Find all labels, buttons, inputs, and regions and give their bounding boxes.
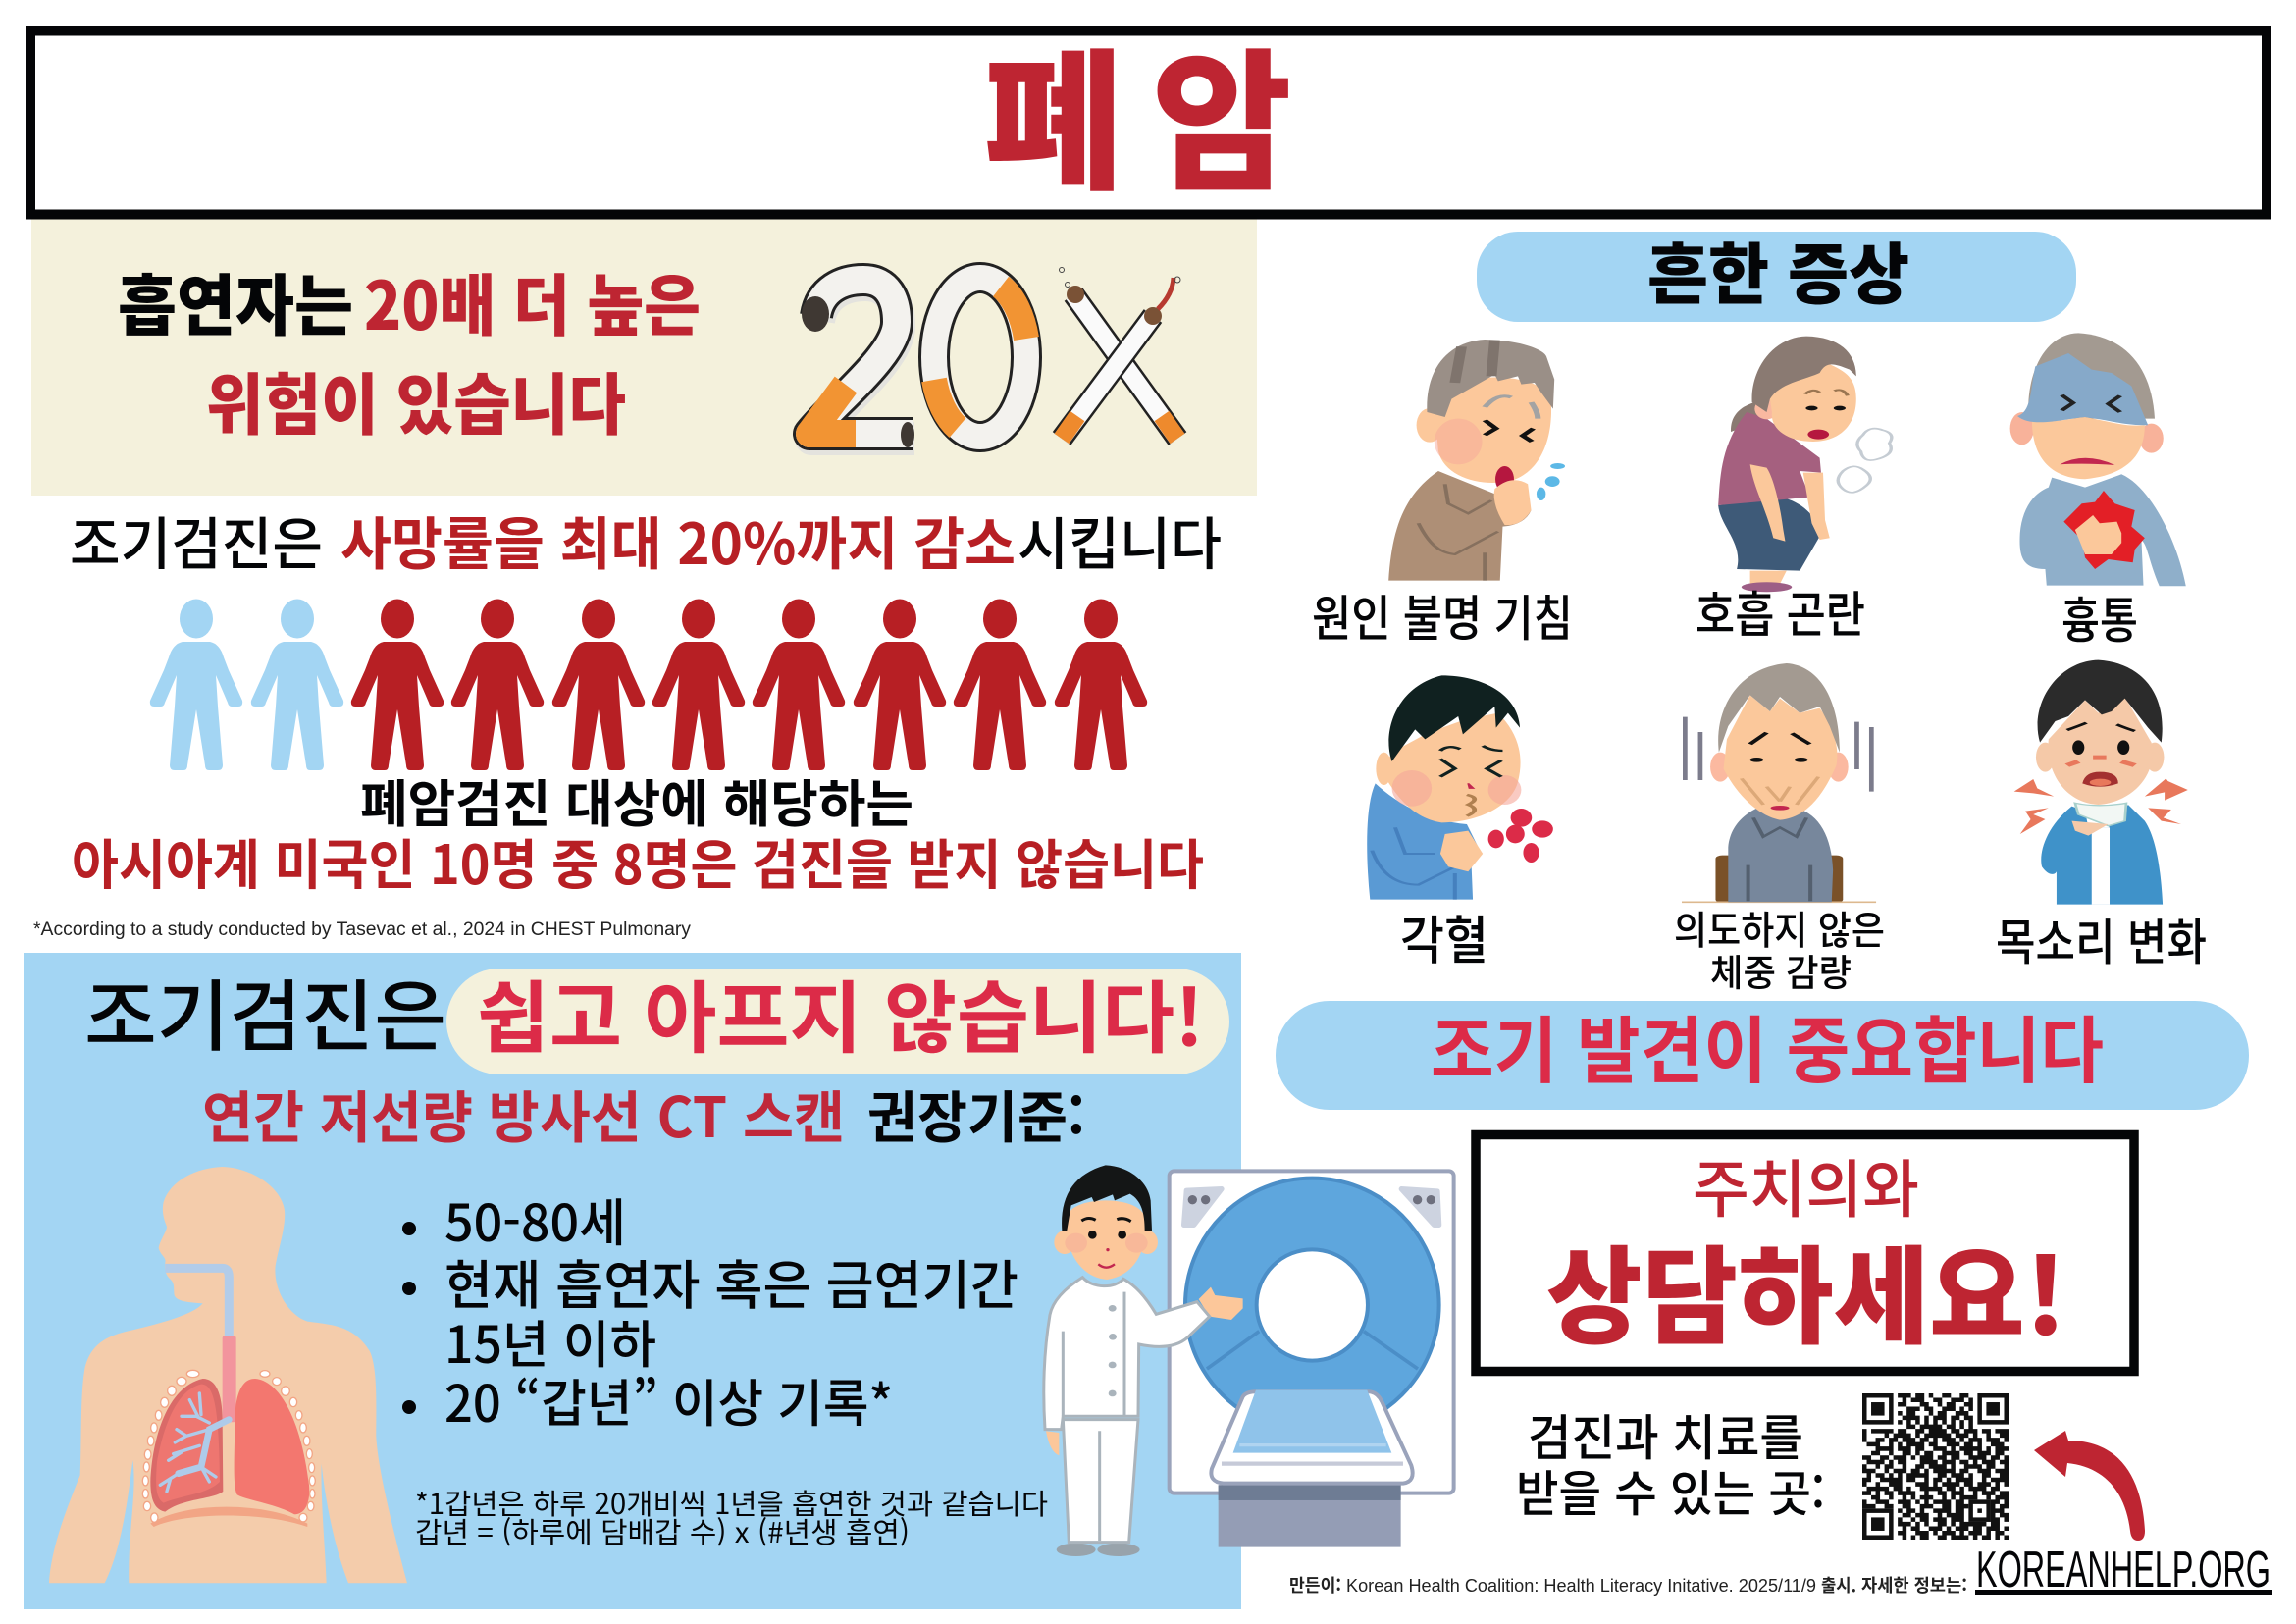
heading: screening is easy and painless: 조기검진은 xyxy=(84,954,446,1067)
heading: screening is easy and painless: 쉽고 아프지 않습니다! xyxy=(477,956,1204,1070)
title: 암 xyxy=(1152,0,1292,221)
text block: where to get screening: 검진과 치료를 xyxy=(1528,1399,1803,1470)
heading: screening is easy and painless xyxy=(84,954,1229,1074)
callout: early detection is important: 조기 발견이 중요합니다 xyxy=(1431,993,2104,1098)
text block: screening reduces mortality xyxy=(70,498,1222,581)
credit line: 만든이: xyxy=(1289,1572,1341,1598)
illustration: CT scanner xyxy=(1170,1171,1454,1547)
symptom: unexplained cough xyxy=(1312,340,1573,651)
label: 목소리 변화 xyxy=(1996,904,2207,974)
label: 각혈 xyxy=(1400,900,1488,974)
label: 호흡 곤란 xyxy=(1696,576,1865,647)
title: 폐 xyxy=(983,0,1123,221)
illustration: doctor xyxy=(1044,1165,1243,1556)
symptom: coughing blood xyxy=(1367,675,1553,974)
chart: 10 person pictogram, 2 blue and 8 red xyxy=(150,599,1147,770)
source footnote: *According to a study conducted by Tasevac et al., 2024 in CHEST Pulmonary xyxy=(33,919,692,940)
panel: common symptoms heading xyxy=(1477,221,2076,322)
icon: boy coughing blood xyxy=(1367,675,1553,900)
list: screening criteria bullets: 현재 흡연자 혹은 금연기간 xyxy=(444,1242,1018,1320)
icon: breathless woman xyxy=(1718,337,1892,592)
callout: talk to your doctor xyxy=(1476,1134,2134,1372)
icon: boy with sore throat xyxy=(2014,660,2188,905)
heading: smokers 20 times risk: 위험이 있습니다 xyxy=(206,351,626,448)
icon: man with chest pain xyxy=(2010,333,2186,586)
text block: where to get screening: 받을 수 있는 곳: xyxy=(1516,1455,1825,1526)
heading: smokers 20 times risk: 흡연자는 xyxy=(118,252,353,349)
subheading: annual low dose CT criteria: 권장기준: xyxy=(867,1074,1085,1154)
heading: smokers 20 times risk: 20배 더 높은 xyxy=(364,252,701,349)
text block: screening reduces mortality: 사망률을 최대 20%까지 감소 xyxy=(340,498,1016,581)
title xyxy=(30,0,2267,221)
callout: talk to your doctor: 상담하세요! xyxy=(1546,1213,2066,1366)
footnote: pack-year definition: *1갑년은 하루 20개비씩 1년을 흡연한 것과 같습니다 xyxy=(415,1482,1048,1523)
panel: screening criteria xyxy=(24,953,1241,1609)
footnote: pack-year definition: 갑년 = (하루에 담배갑 수) x (#년생 흡연) xyxy=(415,1510,910,1551)
heading: smokers 20 times risk xyxy=(118,252,701,448)
text block: 8 of 10 Asian Americans not screened xyxy=(72,763,1204,900)
text block: screening reduces mortality: 시킵니다 xyxy=(1018,498,1222,581)
credit line xyxy=(1289,1572,1967,1598)
callout: early detection is important xyxy=(1276,993,2249,1110)
list: screening criteria bullets: 15년 이하 xyxy=(444,1304,656,1378)
list: screening criteria bullets: 50-80세 xyxy=(444,1182,626,1256)
footnote: pack-year definition xyxy=(415,1482,1048,1551)
symptom: shortness of breath xyxy=(1696,337,1892,647)
label: 원인 불명 기침 xyxy=(1312,580,1573,651)
credit line: 출시. xyxy=(1821,1572,1856,1598)
illustration: human body with lungs xyxy=(49,1167,407,1583)
symptom: chest pain xyxy=(2010,333,2186,653)
symptom: voice change xyxy=(1996,660,2207,974)
list: screening criteria bullets xyxy=(402,1182,1018,1437)
text block: 8 of 10 Asian Americans not screened: 폐암검진 대상에 해당하는 xyxy=(360,763,913,837)
text block: 8 of 10 Asian Americans not screened: 아시아계 미국인 10명 중 8명은 검진을 받지 않습니다 xyxy=(72,821,1204,900)
icon: thin elderly man xyxy=(1682,663,1876,903)
credit line: 자세한 정보는: xyxy=(1861,1572,1967,1598)
icon: coughing man xyxy=(1388,340,1565,581)
text block: screening reduces mortality: 조기검진은 xyxy=(70,498,323,581)
symptom: unintentional weight loss xyxy=(1674,663,1885,997)
label xyxy=(1674,899,1885,997)
label: 흉통 xyxy=(2061,582,2138,653)
label: 체중 감량 xyxy=(1710,943,1852,997)
callout: talk to your doctor: 주치의와 xyxy=(1693,1140,1919,1231)
icon: 20X made of cigarettes xyxy=(802,267,1180,447)
label: 의도하지 않은 xyxy=(1674,899,1885,956)
panel: smoker risk xyxy=(31,219,1257,496)
credit line: Korean Health Coalition: Health Literacy Initative. 2025/11/9 xyxy=(1346,1576,1816,1596)
text block: where to get screening xyxy=(1516,1399,1825,1526)
panel: common symptoms heading: 흔한 증상 xyxy=(1647,221,1909,318)
QR code xyxy=(1862,1393,2009,1540)
arrow: pointing to QR code xyxy=(2034,1431,2145,1541)
list: screening criteria bullets: 20 “갑년” 이상 기록* xyxy=(444,1363,893,1437)
subheading: annual low dose CT criteria: 연간 저선량 방사선 CT 스캔 xyxy=(202,1074,845,1154)
